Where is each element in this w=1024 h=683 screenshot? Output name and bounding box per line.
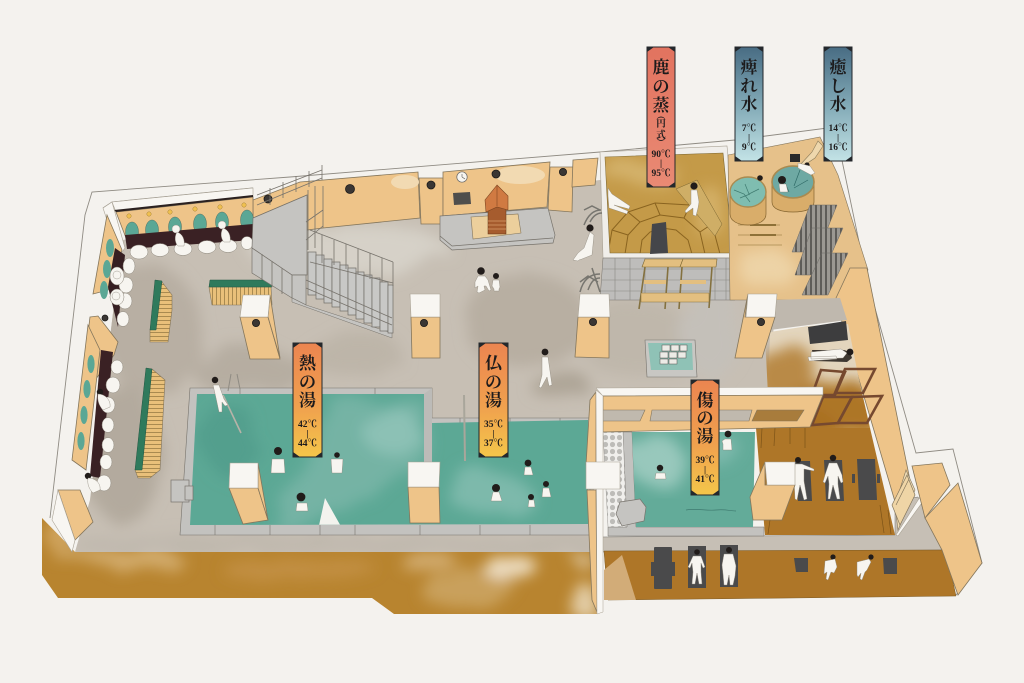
sauna steps <box>676 180 722 236</box>
pillar 7 <box>586 462 620 489</box>
label: healing water: し <box>830 77 846 96</box>
right exterior steps <box>912 463 982 595</box>
clock <box>457 172 467 182</box>
label: deer steam: ︵ <box>656 112 666 122</box>
pools: hot and buddha baths <box>171 374 588 530</box>
bottom brown ground <box>42 517 597 618</box>
label: buddha bath <box>479 343 508 457</box>
pillar 6 <box>408 462 440 523</box>
bathers buddha pool <box>491 460 551 507</box>
sauna person right <box>685 182 699 216</box>
label: deer steam: 95℃ <box>651 168 671 179</box>
label: wound bath: 41℃ <box>695 474 715 485</box>
pillar 3 <box>575 294 610 358</box>
shrine <box>485 185 508 234</box>
lamps <box>264 168 567 203</box>
pillar 8 <box>750 462 795 520</box>
label: buddha bath: 仏 <box>485 354 504 373</box>
people walking <box>475 267 552 388</box>
label: buddha bath: 37℃ <box>484 438 503 449</box>
person lying <box>823 455 843 499</box>
railings <box>257 165 393 286</box>
sauna person left <box>608 188 630 214</box>
pillar 5 <box>229 463 268 524</box>
label: wound bath: 傷 <box>696 391 714 410</box>
pillar 4 <box>735 294 777 358</box>
tub right <box>772 162 815 212</box>
drying racks <box>792 205 848 295</box>
label: numb water: れ <box>740 77 758 96</box>
label: wound bath <box>691 380 719 495</box>
wooden frames <box>812 369 882 425</box>
label: buddha bath: の <box>485 373 502 392</box>
label: deer steam: 式 <box>656 129 666 141</box>
loungers <box>795 459 880 501</box>
label: deer steam: 円 <box>656 119 666 130</box>
outdoor loungers and resting people <box>651 545 897 589</box>
label: healing water: | <box>837 134 839 144</box>
bathers hot pool <box>271 447 343 511</box>
vertical post <box>586 390 603 614</box>
pool divider <box>424 388 432 462</box>
bath of wounds <box>603 431 764 536</box>
rock <box>616 499 646 526</box>
label: deer steam <box>647 47 675 187</box>
left bathing counters <box>52 188 254 552</box>
label: numb water: | <box>748 134 750 144</box>
label: numb water: 9℃ <box>742 142 756 153</box>
lights <box>127 203 246 218</box>
label: wound bath: の <box>696 409 714 428</box>
label: numb water: 痺 <box>740 57 758 77</box>
brown wooden room <box>756 428 915 535</box>
cold bath room <box>728 137 868 300</box>
sauna room <box>600 146 738 309</box>
label: deer steam: 蒸 <box>652 95 670 115</box>
sauna stove <box>650 222 668 254</box>
right floors and brown ground <box>600 497 956 600</box>
tub left <box>730 175 766 225</box>
label: wound bath: | <box>704 466 706 476</box>
bath tap box <box>171 480 193 502</box>
label: hot bath: 42℃ <box>298 419 317 430</box>
hot stone basin <box>645 340 697 377</box>
label: hot bath <box>293 343 322 457</box>
label: deer steam: の <box>652 78 670 96</box>
label: hot bath: 熱 <box>299 353 317 373</box>
staircase <box>252 165 393 338</box>
label: numb water: 水 <box>740 95 758 114</box>
label: buddha bath: 35℃ <box>484 419 503 430</box>
shrine platform <box>440 185 555 250</box>
left counter upper <box>103 202 125 256</box>
steps <box>308 252 393 333</box>
label: healing water: 16℃ <box>828 142 848 153</box>
left stools upper <box>110 258 135 326</box>
label: numb water <box>735 47 763 161</box>
left stools lower <box>97 360 123 491</box>
pool ladder and handrails <box>223 395 241 433</box>
pillar 1 <box>240 295 280 359</box>
right tan wall <box>836 268 924 536</box>
person resting <box>824 554 837 580</box>
sauna wooden steps <box>639 259 717 309</box>
label: deer steam: 鹿 <box>652 57 670 77</box>
pool rim <box>180 388 590 535</box>
label: wound bath: 39℃ <box>695 455 715 466</box>
building outer outline <box>50 127 982 595</box>
label: hot bath: 44℃ <box>298 438 317 449</box>
label: buddha bath: 湯 <box>485 391 502 410</box>
label: wound bath: 湯 <box>696 427 714 446</box>
bather with ladder <box>212 377 228 412</box>
pillar 2 <box>410 294 440 358</box>
back wall with lamps <box>253 158 598 230</box>
label: healing water: 水 <box>830 95 846 114</box>
label: hot bath: の <box>299 373 316 392</box>
mirrors <box>126 210 254 242</box>
bathers <box>655 431 732 479</box>
lower left corner block <box>58 490 93 540</box>
door frame <box>892 475 915 525</box>
floor <box>75 180 775 552</box>
label: hot bath: 湯 <box>299 391 316 410</box>
sauna benches <box>608 203 720 254</box>
seated person and chairs by sauna <box>573 206 602 292</box>
label: numb water: 7℃ <box>742 123 756 134</box>
resting person <box>808 349 853 362</box>
label: healing water <box>824 47 852 161</box>
benches <box>135 280 272 478</box>
person on lounger <box>688 549 705 584</box>
water pipe <box>800 141 823 166</box>
upper rest room <box>766 298 884 428</box>
beam over wounds bath <box>596 387 823 432</box>
label: hot bath: | <box>306 430 309 440</box>
bathers at back counter <box>172 221 230 246</box>
label: healing water: 14℃ <box>828 123 848 134</box>
label: deer steam: ︶ <box>656 138 666 149</box>
cobble stones <box>603 432 627 527</box>
plaque <box>453 192 471 205</box>
label: deer steam: | <box>660 159 662 169</box>
person standing <box>794 457 814 500</box>
label: deer steam: 90℃ <box>651 149 671 160</box>
bathers at left counter <box>85 271 121 493</box>
person resting <box>857 554 874 580</box>
person on lounger <box>722 547 736 585</box>
counter strip <box>125 224 253 249</box>
label: healing water: 癒 <box>830 57 848 77</box>
stools <box>130 236 253 259</box>
label: buddha bath: | <box>492 430 495 440</box>
stone wall <box>600 258 738 300</box>
